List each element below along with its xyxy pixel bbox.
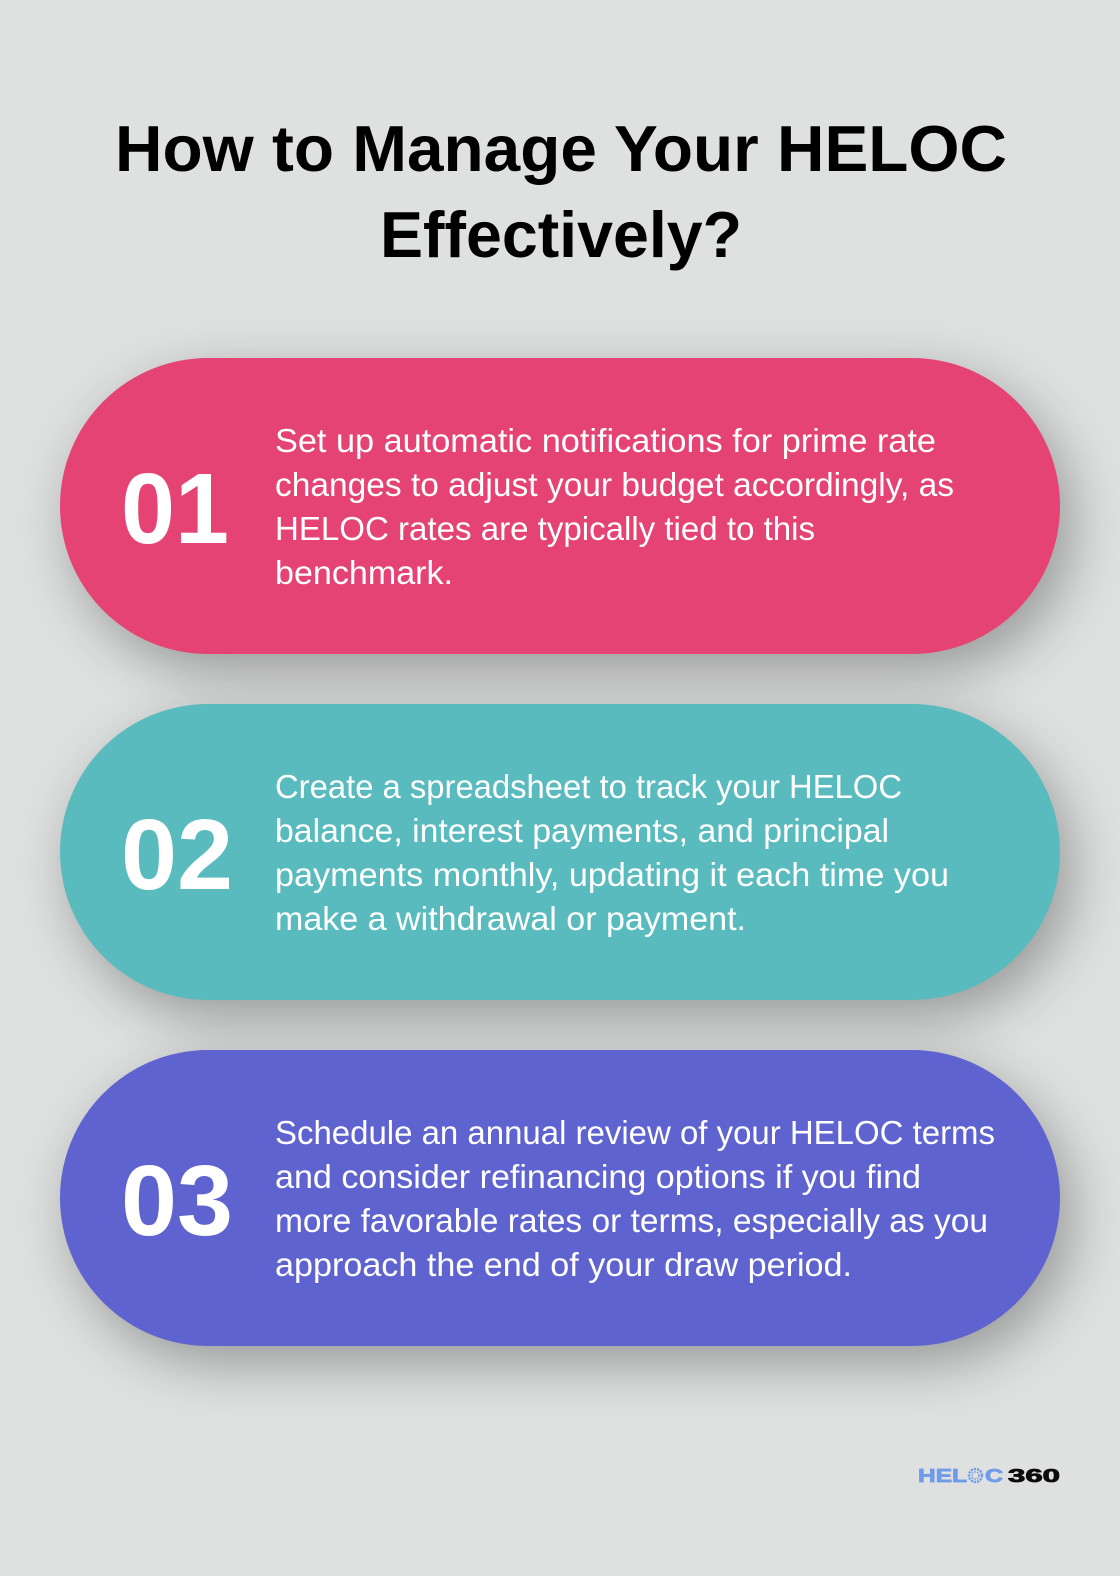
text block: step 1: benchmark. <box>275 554 453 591</box>
text block: step 3: Schedule an annual review of your HELOC terms <box>275 1114 995 1151</box>
text block: step 1 <box>275 422 954 591</box>
panel: step 1 pill <box>60 358 1060 654</box>
text block: step 1: changes to adjust your budget accordingly, as <box>275 466 954 503</box>
title: Effectively? <box>380 198 742 271</box>
text block: step 2: Create a spreadsheet to track your HELOC <box>275 768 902 805</box>
text block: step 2: payments monthly, updating it each time you <box>275 856 949 893</box>
text block: step 2 <box>275 768 949 937</box>
text block: step 3: more favorable rates or terms, especially as you <box>275 1202 988 1239</box>
number 02: 02 <box>121 799 233 911</box>
title <box>115 112 1007 271</box>
text block: step 2: balance, interest payments, and principal <box>275 812 889 849</box>
logo: HELOC360 <box>918 1466 1060 1486</box>
panel: step 3 pill <box>60 1050 1060 1346</box>
logo: HELOC360: C <box>985 1466 1003 1486</box>
text block: step 1: Set up automatic notifications for prime rate <box>275 422 936 459</box>
text block: step 3: approach the end of your draw period. <box>275 1246 852 1283</box>
panel: step 2 pill <box>60 704 1060 1000</box>
logo: HELOC360: 360 <box>1008 1466 1060 1486</box>
number 03: 03 <box>121 1145 233 1257</box>
number 01: 01 <box>121 453 229 565</box>
icon: swirl <box>969 1469 982 1482</box>
text block: step 3 <box>275 1114 995 1283</box>
text block: step 3: and consider refinancing options if you find <box>275 1158 921 1195</box>
title: How to Manage Your HELOC <box>115 112 1007 185</box>
text block: step 2: make a withdrawal or payment. <box>275 900 746 937</box>
logo: HELOC360: HEL <box>918 1466 967 1486</box>
text block: step 1: HELOC rates are typically tied to this <box>275 510 815 547</box>
